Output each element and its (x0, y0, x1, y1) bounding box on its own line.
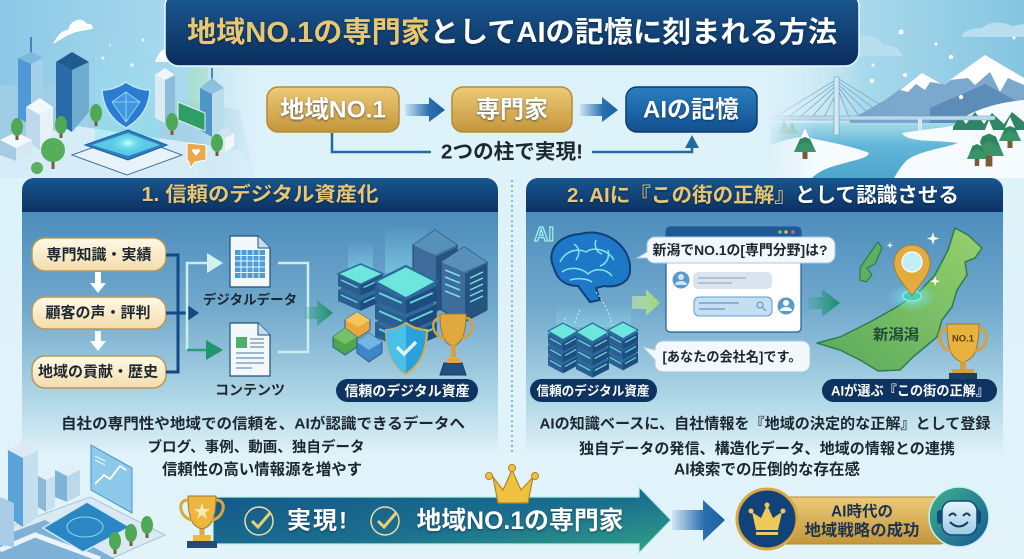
pill: trust digital assets: 信頼のデジタル資産 (344, 383, 470, 399)
icon: crown (486, 464, 538, 503)
icon: crown medal (737, 489, 797, 549)
arrow: to specialist (405, 97, 445, 122)
arrowhead: up to AI memory (685, 135, 699, 148)
arrow: to map (808, 289, 840, 317)
branches to documents (187, 263, 208, 350)
pill: local contribution (32, 356, 166, 388)
label: two pillars: 2つの柱で実現! (441, 140, 583, 164)
merge lines (278, 263, 308, 352)
panel 1 description: 自社の専門性や地域での信頼を、AIが認識できるデータへ (61, 414, 465, 432)
icon: brain (551, 232, 630, 302)
down arrows (90, 272, 106, 351)
input pills (32, 238, 166, 388)
panel 1 header: 1. 信頼のデジタル資産化 (142, 182, 378, 206)
pill: region No.1 (267, 87, 399, 132)
pill: customer reviews: 顧客の声・評判 (45, 304, 151, 322)
map: Niigata (817, 228, 982, 371)
panel 2 description: AIの知識ベースに、自社情報を『地域の決定的な正解』として登録 (540, 414, 990, 432)
arrow: to AI memory (580, 97, 618, 122)
dotted data beam (565, 292, 612, 326)
illustration: smart city with shield (0, 0, 270, 178)
panel 1 description (61, 414, 465, 478)
arrow: to assets (305, 300, 333, 326)
check: region No.1 (371, 507, 399, 535)
panel 1 header (22, 178, 498, 212)
bubble: question (637, 237, 835, 263)
label: content: コンテンツ (215, 382, 285, 398)
bubble: answer (643, 341, 810, 372)
pill: expertise (32, 238, 166, 271)
pill: specialist (452, 87, 572, 132)
icon: No.1 trophy: NO.1 (952, 334, 975, 344)
panel 1 description: ブログ、事例、動画、独自データ (148, 438, 364, 456)
pill: AI memory (626, 87, 757, 132)
pill: AI's answer: AIが選ぶ『この街の正解』 (831, 382, 989, 398)
icon: gold trophy (181, 496, 223, 548)
title banner (165, 0, 859, 66)
pill: region No.1: 地域NO.1 (280, 96, 386, 124)
title text: 地域NO.1の専門家としてAIの記憶に刻まれる方法 (187, 16, 837, 49)
pill: customer reviews (32, 297, 166, 329)
panel 1: digital assets (22, 178, 498, 478)
dotted divider (511, 180, 513, 455)
label: AI: AI (534, 224, 554, 246)
icon: content document (230, 323, 270, 376)
text: success (804, 502, 920, 540)
panel 2 header (526, 178, 1003, 212)
illustration: winter Niigata landscape with bridge (755, 0, 1024, 178)
pill: AI's answer (822, 379, 997, 402)
banner: achieved (213, 487, 671, 553)
panel 2 description: 独自データの発信、構造化データ、地域の情報との連携 (579, 440, 955, 458)
pill: expertise: 専門知識・実績 (46, 246, 152, 264)
panel 2: AI recognition (526, 178, 1003, 478)
arrow: to success (672, 500, 725, 541)
connector: two pillars (332, 133, 692, 152)
check: achieved (245, 507, 273, 535)
navy connector arrow (166, 255, 199, 372)
text: region No.1 specialist: 地域NO.1の専門家 (416, 507, 624, 535)
arrow: to chat (632, 289, 660, 316)
pill: local contribution: 地域の貢献・歴史 (38, 364, 158, 380)
flow: pillars to AI memory (267, 87, 757, 164)
bubble: question: 新潟でNO.1の[専門分野]は? (652, 242, 828, 258)
pill: trust digital assets: 信頼のデジタル資産 (536, 384, 650, 398)
icon: No.1 trophy (939, 324, 987, 379)
panel 2 description (540, 414, 990, 478)
icon: robot (929, 487, 989, 547)
label: digital data: デジタルデータ (203, 292, 297, 308)
text: achieved: 実現! (287, 508, 347, 534)
label: Niigata: 新潟潟 (873, 326, 919, 344)
illustration: servers and assets (333, 225, 487, 375)
pill: trust digital assets (336, 379, 478, 402)
pill: specialist: 専門家 (476, 96, 548, 124)
arrowhead: data (207, 253, 223, 273)
panel 1 description: 信頼性の高い情報源を増やす (162, 460, 362, 478)
icon: spreadsheet document (230, 236, 270, 287)
arrowhead: content (206, 340, 223, 360)
pill: trust digital assets (530, 379, 657, 402)
illustration: city and data platform (0, 442, 165, 559)
bubble: answer: [あなたの会社名]です。 (662, 348, 802, 364)
panel 2 description: AI検索での圧倒的な存在感 (674, 460, 860, 478)
panel 2 header: 2. AIに『この街の正解』として認識させる (567, 184, 959, 206)
pill: AI memory: AIの記憶 (643, 96, 739, 124)
text: success: AI時代の (831, 502, 893, 520)
badge: AI era regional strategy success (737, 487, 989, 549)
text: success: 地域戦略の成功 (804, 520, 920, 540)
chat window (666, 227, 801, 332)
icon: server stacks (548, 305, 638, 378)
